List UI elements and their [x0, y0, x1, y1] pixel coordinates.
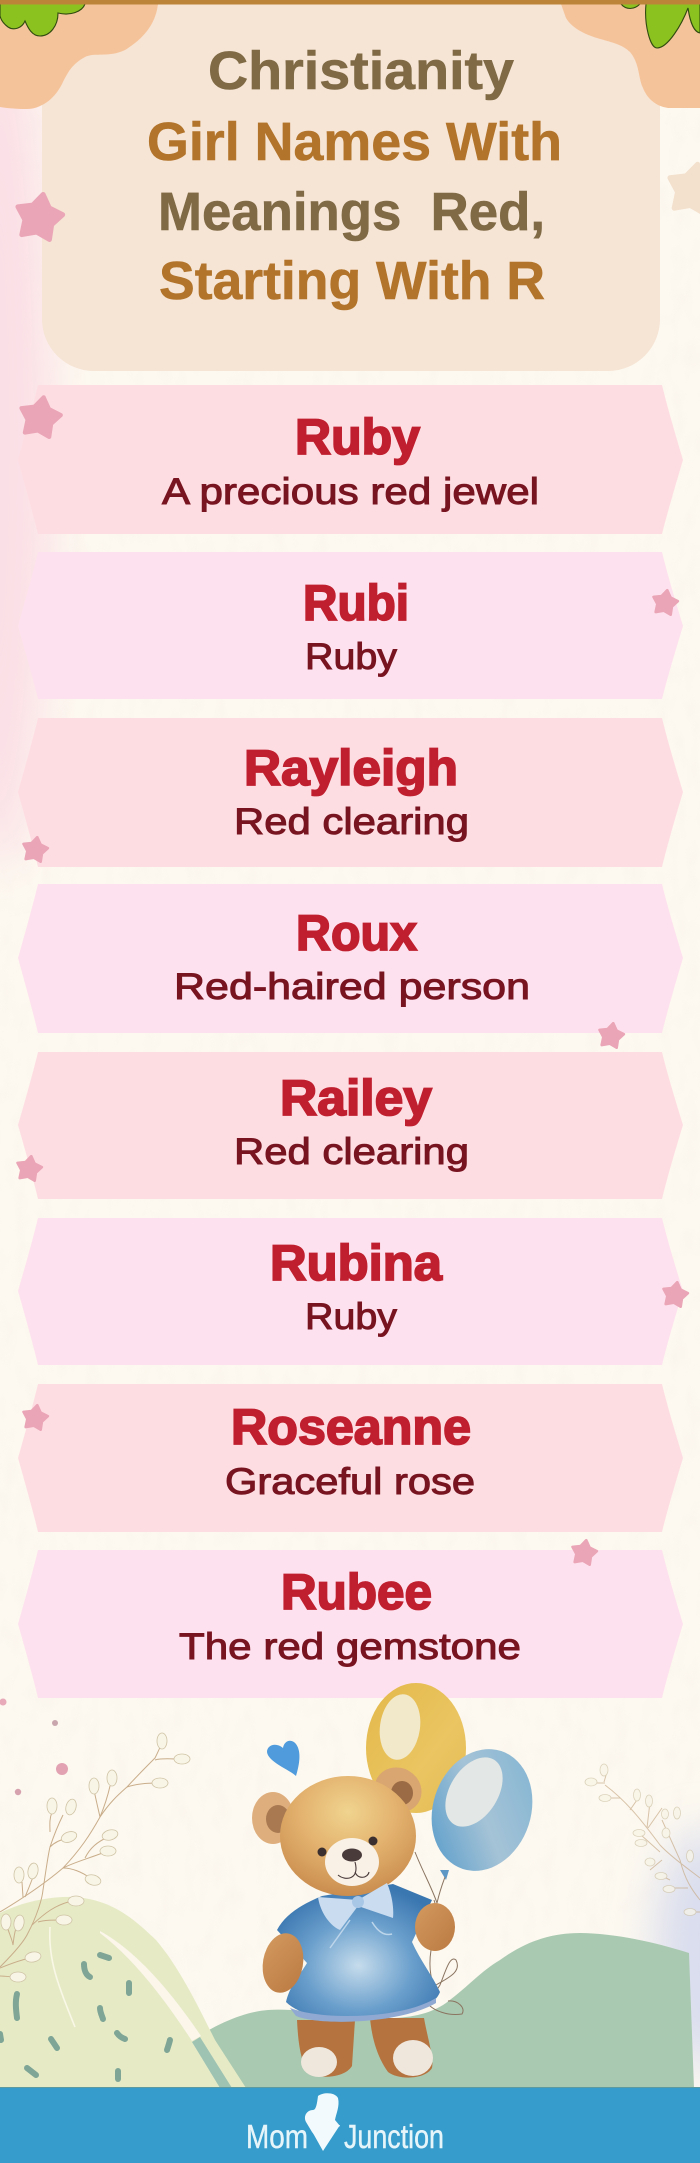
bear arm left	[258, 1930, 308, 1996]
hill: left pale green with streak and dashes	[0, 1897, 246, 2088]
star: Roux panel	[600, 1023, 624, 1048]
panel: Roseanne	[18, 1384, 683, 1532]
panel: Railey	[18, 1052, 683, 1199]
footer band	[0, 2087, 700, 2163]
logo: MomJunction: Junction	[344, 2118, 444, 2155]
panel: Railey: Railey	[280, 1070, 432, 1126]
star: header right beige	[670, 164, 700, 213]
title: Girl Names With	[147, 112, 562, 172]
balloon strings	[415, 1852, 463, 2014]
panel: Rayleigh	[18, 718, 683, 867]
star: Railey panel	[18, 1156, 42, 1181]
logo icon: mother and child	[305, 2093, 340, 2151]
header panel	[42, 0, 660, 371]
star: Rubi panel	[654, 590, 678, 615]
panel: Rubi: Ruby	[305, 636, 398, 677]
title: Starting With R	[159, 251, 545, 311]
logo: MomJunction: Mom	[246, 2118, 308, 2155]
bear eyes	[318, 1836, 378, 1856]
top bar	[0, 0, 700, 4]
panel: Ruby	[18, 385, 683, 534]
panel: Roux: Red-haired person	[174, 966, 530, 1007]
panel: Roux: Roux	[296, 905, 417, 961]
bear bow	[318, 1883, 393, 1948]
panel: Rubina	[18, 1218, 683, 1365]
panel: Rayleigh: Red clearing	[234, 801, 469, 842]
bear ear left	[252, 1792, 294, 1844]
bear mouth	[338, 1862, 369, 1878]
icon: blue heart	[267, 1741, 299, 1776]
panel: Rubi: Rubi	[303, 575, 409, 631]
title	[147, 41, 562, 311]
decorative dots	[0, 1698, 68, 1795]
corner blob: top left with leaves	[0, 4, 158, 109]
panel: Rubi	[18, 552, 683, 699]
panel: Rubee: The red gemstone	[179, 1626, 521, 1667]
panel: Ruby: Ruby	[295, 409, 420, 465]
bear head	[280, 1776, 416, 1896]
panel: Rubee: Rubee	[281, 1564, 432, 1620]
dress hem	[290, 1998, 436, 2022]
panel: Roseanne: Roseanne	[231, 1399, 471, 1455]
star: Rubina panel	[664, 1282, 688, 1307]
bear arm right	[415, 1903, 455, 1951]
logo: MomJunction	[246, 2093, 444, 2155]
bear nose	[342, 1848, 362, 1862]
panel: Roux	[18, 884, 683, 1033]
icon: blue balloon	[416, 1736, 548, 1884]
panel: Rubee	[18, 1550, 683, 1698]
star: header left	[18, 194, 63, 240]
panel: Rayleigh: Rayleigh	[244, 740, 458, 796]
bear dress	[277, 1884, 440, 2020]
twigs: left	[0, 1733, 190, 1982]
bear legs	[297, 2018, 433, 2078]
icon: yellow balloon	[366, 1683, 466, 1813]
panel: Ruby: A precious red jewel	[162, 471, 539, 512]
hill: right green	[192, 1933, 694, 2088]
bear ear right	[366, 1759, 430, 1821]
star: Ruby panel	[21, 397, 61, 437]
title: Christianity	[208, 41, 514, 101]
title: Meanings Red,	[158, 182, 545, 242]
panel: Rubina: Ruby	[305, 1296, 398, 1337]
star: Rubee panel	[573, 1540, 597, 1565]
star: Roseanne panel	[24, 1405, 48, 1430]
twigs: right	[585, 1764, 700, 1916]
corner blob: top right with leaves	[561, 4, 700, 108]
star: Rayleigh panel	[24, 837, 48, 862]
panel: Railey: Red clearing	[234, 1131, 469, 1172]
panel: Roseanne: Graceful rose	[225, 1461, 475, 1502]
panel: Rubina: Rubina	[270, 1235, 443, 1291]
bear muzzle	[325, 1838, 379, 1886]
teddy bear	[252, 1759, 455, 2078]
